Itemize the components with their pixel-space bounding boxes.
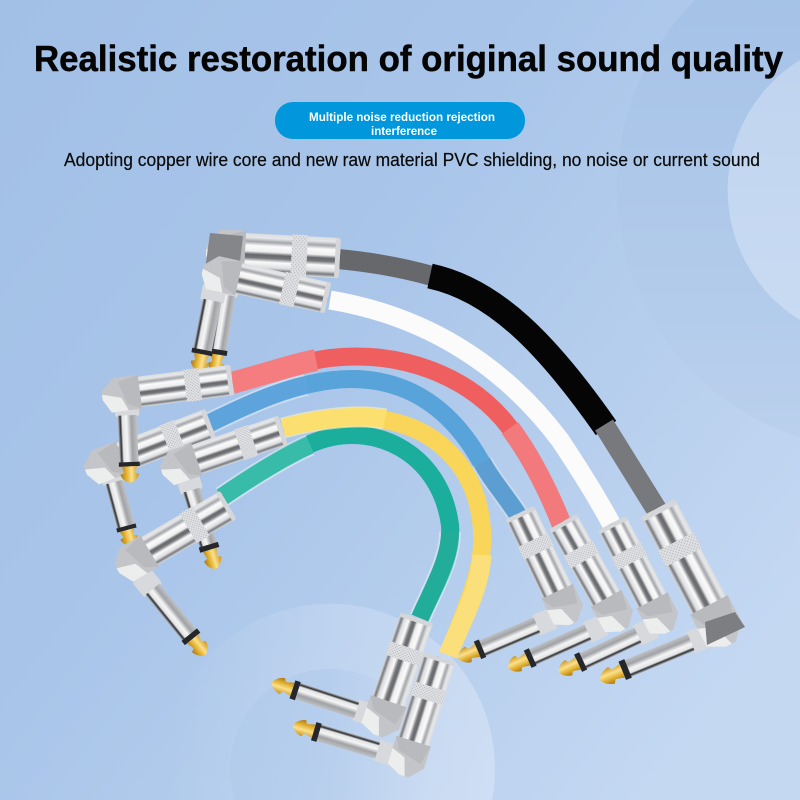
title: Realistic restoration of original sound quality: [34, 38, 783, 79]
connector group: mid left, blue red yellow teal: [79, 363, 289, 662]
product: six patch cables: [79, 229, 749, 781]
cable: black: [338, 259, 660, 515]
pill badge: Multiple noise reduction rejection: [309, 110, 495, 124]
cable: white: [330, 300, 612, 525]
connector group: bottom, teal and yellow: [268, 612, 457, 781]
pill badge: [275, 102, 525, 139]
cable: yellow: [283, 417, 482, 655]
connector group: upper left, black and white: [186, 229, 341, 376]
cable: teal: [222, 435, 450, 618]
pill badge: interference: [371, 124, 437, 138]
cable: red: [232, 357, 562, 525]
cable: blue: [208, 379, 518, 515]
subtitle: Adopting copper wire core and new raw material PVC shielding, no noise or current sound: [64, 150, 760, 170]
connector group: lower right, blue red white black: [454, 498, 749, 691]
